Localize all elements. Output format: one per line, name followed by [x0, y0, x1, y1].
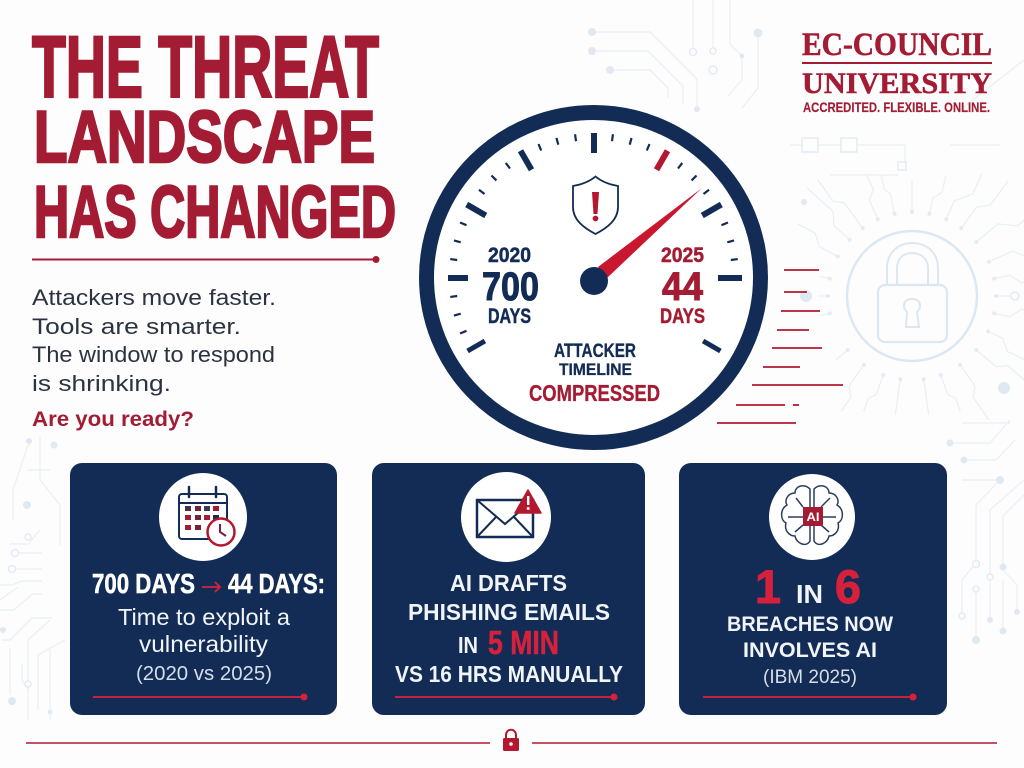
icon: AI brain	[769, 474, 855, 560]
card rule	[703, 694, 916, 700]
gauge label: 2020: 2020	[488, 244, 531, 267]
gauge caption: TIMELINE	[559, 360, 632, 379]
gauge label: 2025	[660, 244, 705, 328]
card text	[118, 604, 290, 685]
gauge dial	[426, 112, 760, 442]
intro text: Tools are smarter.	[32, 314, 241, 339]
circuit pattern: lock radial	[792, 167, 1024, 419]
gauge label: 2020	[482, 244, 539, 328]
gauge label: 2020: DAYS	[488, 305, 531, 328]
card text	[727, 560, 893, 688]
circuit pattern: upper right	[790, 60, 1024, 175]
card text: INVOLVES AI	[743, 639, 877, 662]
faded padlock emblem	[847, 231, 977, 361]
gauge caption: COMPRESSED	[529, 380, 660, 406]
card text: 1	[755, 560, 781, 613]
gauge caption: ATTACKER	[554, 341, 636, 362]
card headline	[92, 568, 325, 599]
logo: UNIVERSITY	[802, 67, 992, 100]
circuit pattern: bottom right	[946, 420, 1024, 644]
card text: PHISHING EMAILS	[408, 599, 610, 625]
card text: VS 16 HRS MANUALLY	[395, 661, 623, 687]
panel: AI breaches	[679, 463, 947, 715]
title: LANDSCAPE	[34, 97, 375, 178]
icon: envelope alert	[461, 472, 551, 562]
call to action: Are you ready?	[32, 407, 194, 431]
gauge label: 2020: 700	[482, 265, 539, 309]
card text: IN	[796, 579, 823, 609]
card text: vulnerability	[139, 631, 269, 657]
circuit pattern: top centre	[588, 0, 762, 112]
gauge label: 2025: DAYS	[660, 305, 705, 328]
intro text: Attackers move faster.	[32, 285, 276, 310]
intro text	[32, 285, 276, 396]
card text: Time to exploit a	[118, 604, 290, 630]
gauge label: 2025: 44	[662, 265, 704, 309]
title: THE THREAT	[32, 19, 379, 116]
circuit pattern: bottom left	[0, 436, 65, 720]
card rule	[93, 694, 308, 700]
card text: 5 MIN	[488, 624, 559, 661]
gauge needle	[580, 188, 702, 295]
icon: calendar with clock	[159, 473, 247, 561]
card text: BREACHES NOW	[727, 613, 893, 636]
card rule	[395, 694, 618, 700]
card text: AI DRAFTS	[450, 570, 567, 596]
logo: EC-COUNCIL	[802, 27, 992, 63]
title	[32, 19, 396, 253]
card text: (IBM 2025)	[763, 667, 857, 688]
gauge label: 2025: 2025	[661, 244, 704, 267]
card text: 6	[835, 560, 861, 613]
footer rule with lock	[26, 730, 997, 751]
icon: AI brain: AI	[806, 510, 820, 524]
panel: time to exploit	[70, 463, 337, 715]
icon: footer lock	[503, 730, 519, 751]
intro text: The window to respond	[32, 342, 275, 367]
card text	[395, 570, 623, 687]
gauge	[426, 112, 760, 442]
gauge caption	[529, 341, 660, 406]
card text: (2020 vs 2025)	[136, 663, 272, 685]
card text: IN	[458, 632, 478, 658]
intro text: is shrinking.	[32, 371, 171, 396]
icon: shield alert	[573, 176, 618, 234]
gauge ticks	[448, 133, 742, 351]
title: HAS CHANGED	[34, 172, 396, 253]
logo	[802, 27, 992, 115]
card headline: 44 DAYS:	[228, 568, 325, 599]
title rule	[32, 256, 380, 263]
panel: phishing emails	[372, 463, 645, 715]
speed lines	[717, 270, 843, 423]
card headline: 700 DAYS	[92, 568, 195, 599]
